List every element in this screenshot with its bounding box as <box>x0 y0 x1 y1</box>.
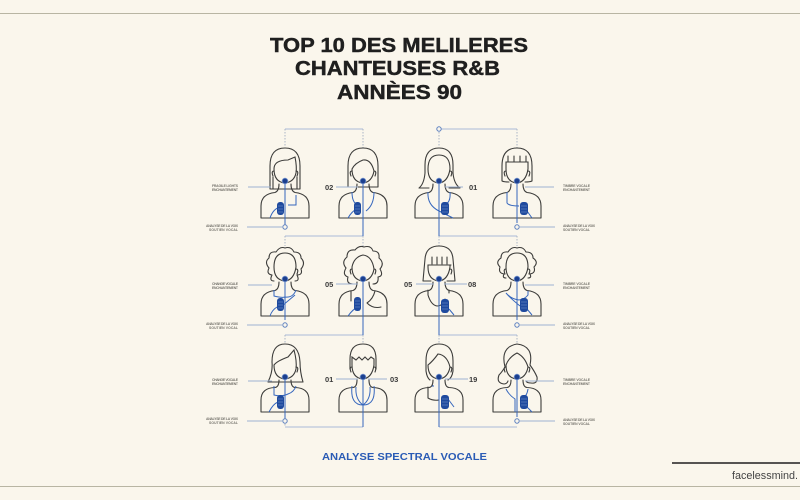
left callouts: ENCHANTEMENT <box>212 382 239 386</box>
portrait: row 2 column 1 <box>261 248 309 320</box>
left callouts: CHANGE VOCALE <box>212 378 239 382</box>
title: CHANTEUSES R&B <box>295 58 500 80</box>
right callouts: SOUTIEN VOCAL <box>563 228 590 232</box>
left callouts: SOUTIEN VOCAL <box>209 326 238 330</box>
title: ANNÈES 90 <box>337 81 462 104</box>
left callouts: SOUTIEN VOCAL <box>209 228 238 232</box>
right callouts: ENCHANTEMENT <box>563 188 591 192</box>
right callouts: ANALYSE DE LA VOIX <box>563 418 596 422</box>
portrait: row 1 column 1 <box>261 148 309 227</box>
portrait: row 2 column 4 <box>493 248 541 320</box>
rank numbers: 01 <box>325 375 333 384</box>
rank numbers: 19 <box>469 375 477 384</box>
connector lines between portraits <box>285 127 517 427</box>
portrait: row 1 column 4 <box>493 148 541 223</box>
left callouts <box>206 184 283 425</box>
open nodes on portrait lines <box>283 225 519 423</box>
right callouts: SOUTIEN VOCAL <box>563 422 590 426</box>
title <box>270 35 528 104</box>
left callouts: CHANGE VOCALE <box>212 282 239 286</box>
right callouts: TIMBRE VOCALE <box>563 378 591 382</box>
portrait: row 3 column 2 <box>339 344 387 427</box>
rank numbers: 05 <box>325 280 333 289</box>
rank numbers: 03 <box>390 375 398 384</box>
left callouts: ENCHANTEMENT <box>212 286 239 290</box>
portrait: row 1 column 3 <box>415 148 463 236</box>
left callouts: ANALYSE DE LA VOIX <box>206 417 239 421</box>
left callouts: SOUTIEN VOCAL <box>209 421 238 425</box>
left callouts: ANALYSE DE LA VOIX <box>206 224 239 228</box>
portrait: row 1 column 2 <box>339 148 387 236</box>
left callouts: ENCHANTEMENT <box>212 188 239 192</box>
rank numbers: 02 <box>325 183 333 192</box>
right callouts: TIMBRE VOCALE <box>563 184 591 188</box>
portrait: row 2 column 2 <box>339 246 387 335</box>
right callouts: TIMBRE VOCALE <box>563 282 591 286</box>
right callouts: ENCHANTEMENT <box>563 382 591 386</box>
title: TOP 10 DES MELILERES <box>270 35 528 57</box>
footer brand: facelessmind. <box>732 470 798 482</box>
portrait: row 2 column 3 <box>415 246 463 335</box>
rank numbers: 05 <box>404 280 412 289</box>
rank numbers: 08 <box>468 280 476 289</box>
right callouts: ANALYSE DE LA VOIX <box>563 322 596 326</box>
rank numbers <box>325 183 477 384</box>
right callouts: ENCHANTEMENT <box>563 286 591 290</box>
left callouts: ANALYSE DE LA VOIX <box>206 322 239 326</box>
right callouts: SOUTIEN VOCAL <box>563 326 590 330</box>
caption: ANALYSE SPECTRAL VOCALE <box>322 451 487 463</box>
portrait: row 3 column 4 <box>493 344 541 417</box>
right callouts: ANALYSE DE LA VOIX <box>563 224 596 228</box>
left callouts: FRAGILE LIGHTS <box>212 184 239 188</box>
portrait: row 3 column 3 <box>415 344 463 427</box>
right callouts <box>520 184 596 426</box>
footer rule <box>672 462 800 464</box>
rank numbers: 01 <box>469 183 477 192</box>
portrait: row 3 column 1 <box>261 344 309 421</box>
